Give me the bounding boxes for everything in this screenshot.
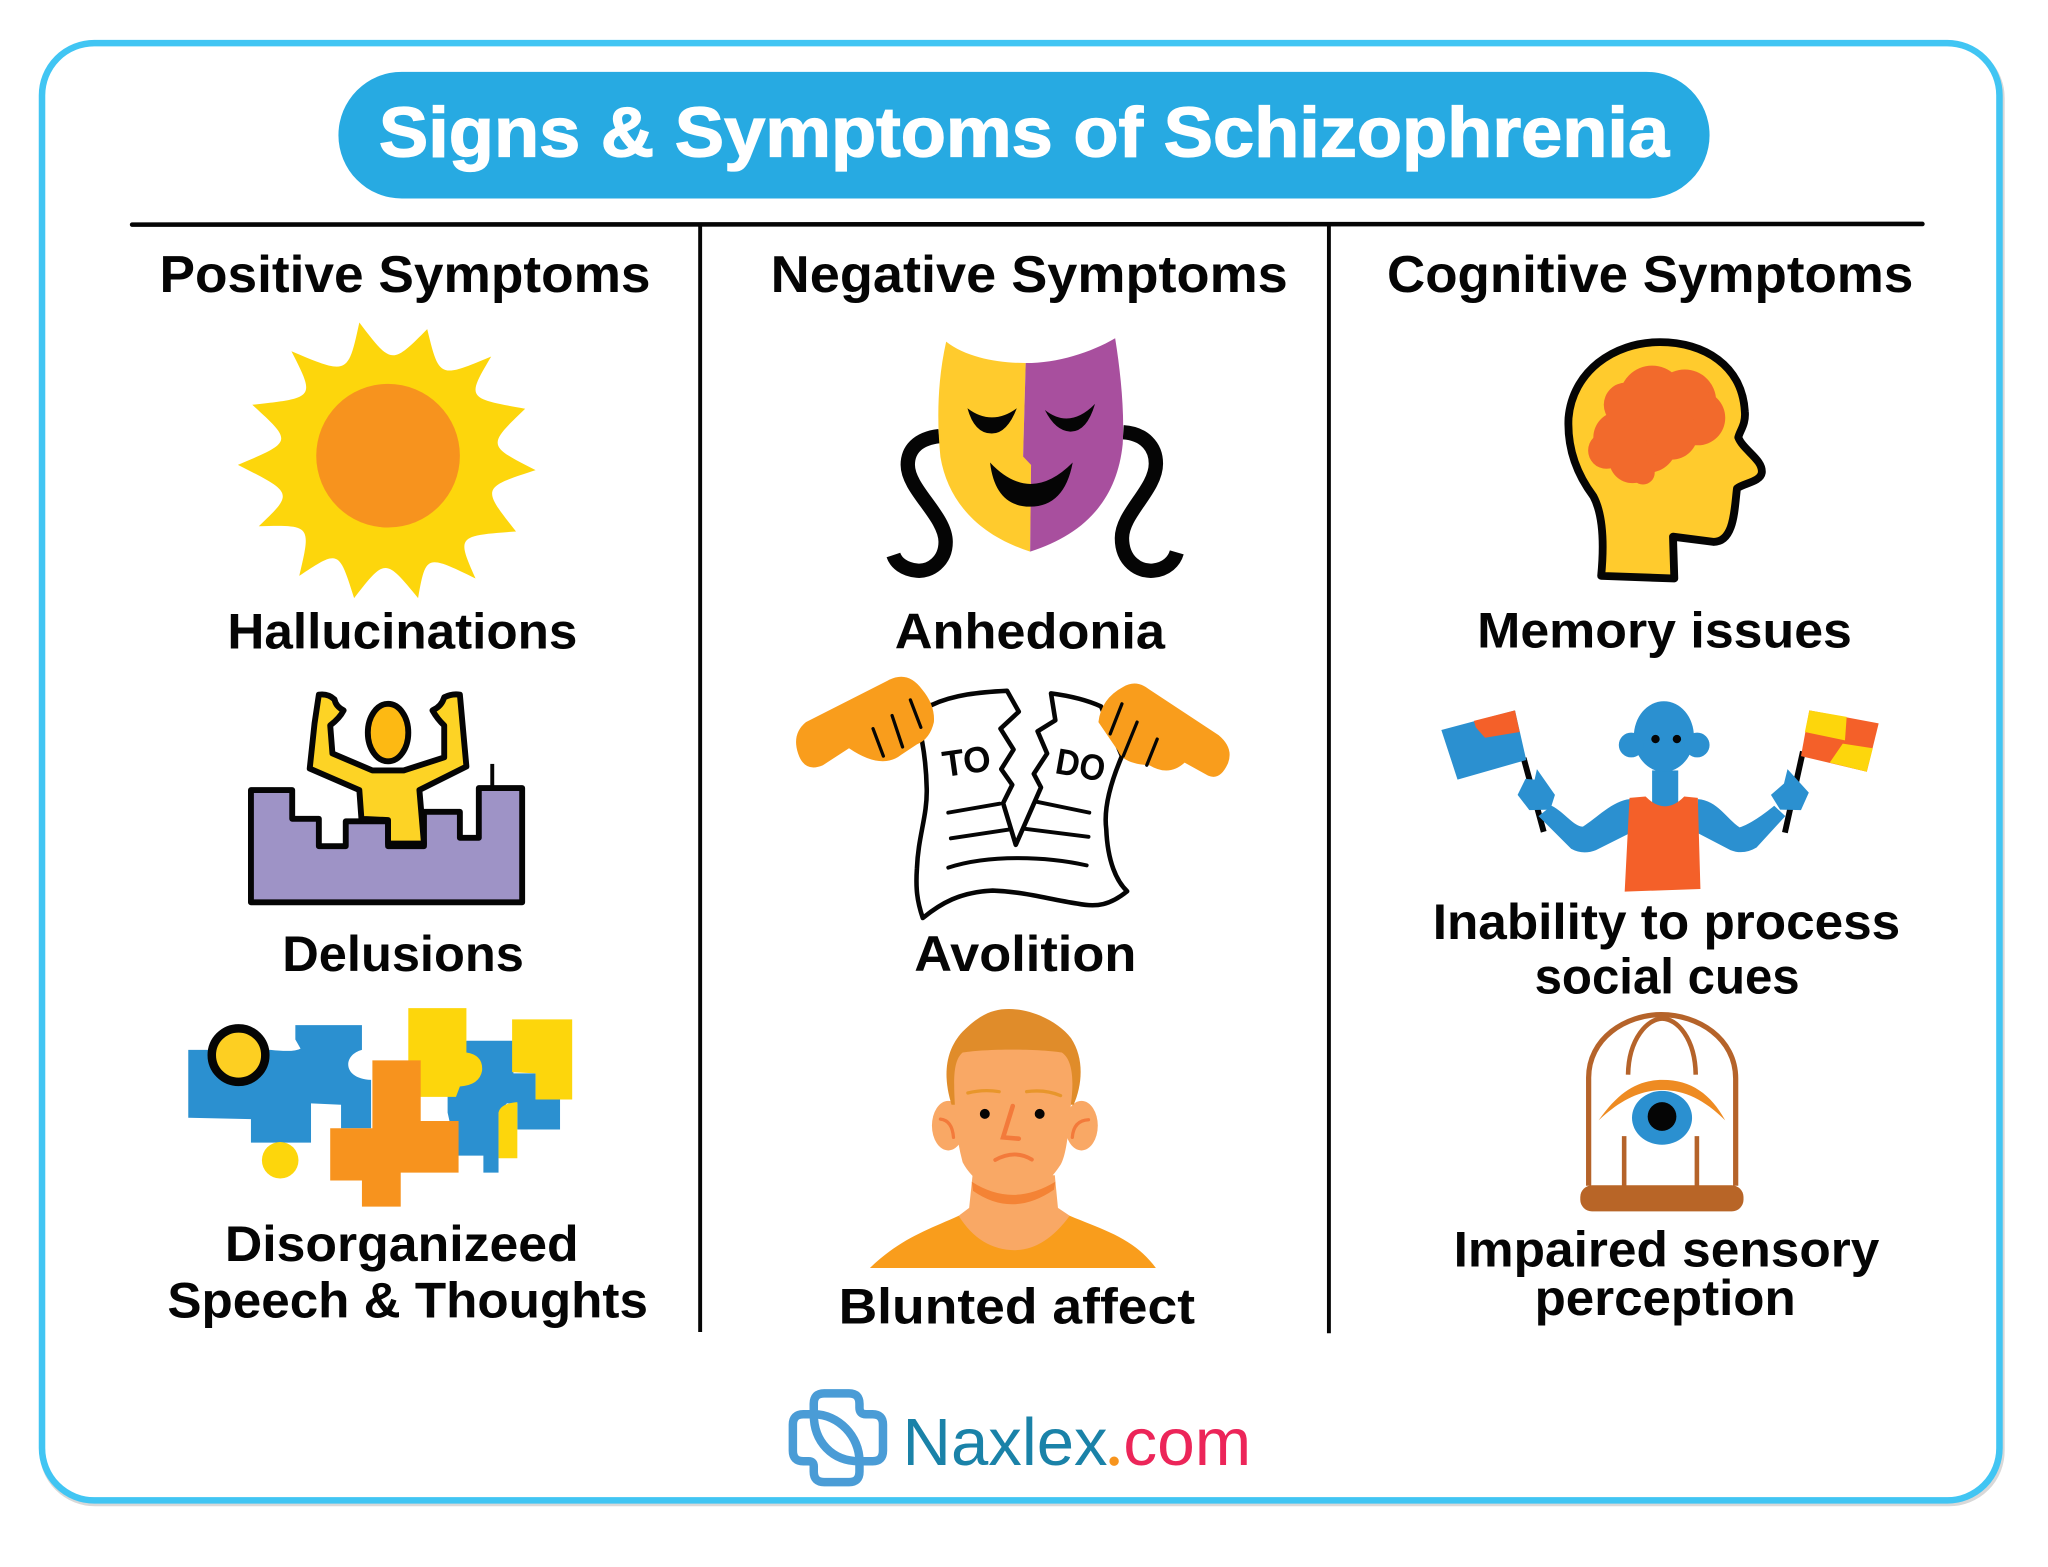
wordmark: com <box>1123 1406 1251 1480</box>
icon: head with brain <box>1568 342 1762 578</box>
label: anhedonia: Anhedonia <box>895 603 1165 659</box>
label: impaired sensory perception: Impaired sensory <box>1454 1222 1880 1278</box>
label: blunted affect: Blunted affect <box>839 1278 1195 1334</box>
label: memory issues: Memory issues <box>1477 603 1852 659</box>
label: inability to process social cues <box>1433 894 1900 1005</box>
title banner <box>338 72 1710 198</box>
logo: Naxlex <box>793 1393 1251 1482</box>
wordmark: Naxlex <box>903 1406 1108 1480</box>
icon: puzzle pieces <box>188 1008 572 1207</box>
label: inability to process social cues: Inability to process <box>1433 894 1900 950</box>
icon: theatre mask <box>893 338 1177 571</box>
label: hallucinations: Hallucinations <box>227 603 577 659</box>
icon: blunted face <box>870 1009 1156 1268</box>
icon: person on castle <box>251 694 522 902</box>
label: disorganized speech and thoughts: Disorganizeed <box>225 1216 579 1272</box>
label: delusions: Delusions <box>282 926 524 982</box>
icon: torn to-do list: DO <box>1053 741 1109 790</box>
icon: eye in a cage <box>1580 1015 1744 1211</box>
label: impaired sensory perception: perception <box>1535 1270 1796 1326</box>
panel: negative symptoms <box>771 246 1288 1334</box>
icon: medical cross <box>793 1393 883 1482</box>
icon: torn to-do list: TO <box>940 738 993 785</box>
label: avolition: Avolition <box>914 926 1136 982</box>
heading: cognitive symptoms: Cognitive Symptoms <box>1387 246 1913 304</box>
icon: torn to-do list <box>796 677 1230 918</box>
icon: sun <box>238 323 536 598</box>
panel: cognitive symptoms <box>1387 246 1913 1326</box>
label: inability to process social cues: social cues <box>1535 949 1800 1005</box>
icon: person holding flags <box>1441 701 1879 892</box>
wordmark <box>903 1406 1251 1480</box>
title: Signs & Symptoms of Schizophrenia <box>379 93 1670 172</box>
panel: positive symptoms <box>160 246 651 1329</box>
label: disorganized speech and thoughts: Speech & Thoughts <box>167 1273 648 1329</box>
heading: positive symptoms: Positive Symptoms <box>160 246 651 304</box>
label: impaired sensory perception <box>1454 1222 1880 1326</box>
label: disorganized speech and thoughts <box>167 1216 648 1329</box>
heading: negative symptoms: Negative Symptoms <box>771 246 1288 304</box>
